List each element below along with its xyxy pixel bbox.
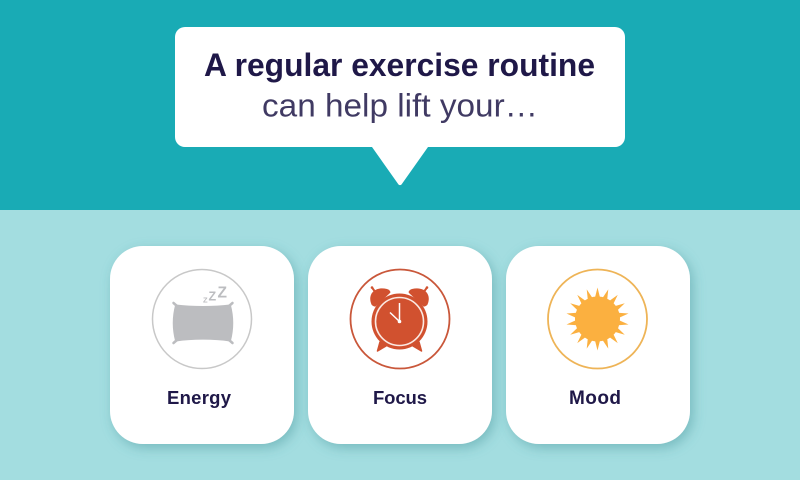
label: mood: Mood xyxy=(569,388,621,409)
icon: pillow with zzz: Z xyxy=(203,296,208,304)
icon: pillow with zzz: Z xyxy=(208,290,216,304)
bottom light band xyxy=(0,210,800,480)
card: energy xyxy=(110,246,294,444)
icon: alarm clock xyxy=(350,270,450,368)
heading line 1: A regular exercise routine xyxy=(204,47,595,83)
icon: pillow with zzz xyxy=(152,270,252,368)
icon: pillow with zzz: Z xyxy=(218,284,228,302)
top teal band xyxy=(0,0,800,210)
label: energy: Energy xyxy=(167,387,232,408)
speech bubble heading xyxy=(175,27,625,185)
icon: sun xyxy=(548,270,647,368)
heading line 2: can help lift your… xyxy=(262,88,538,124)
card: focus xyxy=(308,246,492,444)
label: focus: Focus xyxy=(373,387,427,408)
card: mood xyxy=(506,246,690,444)
